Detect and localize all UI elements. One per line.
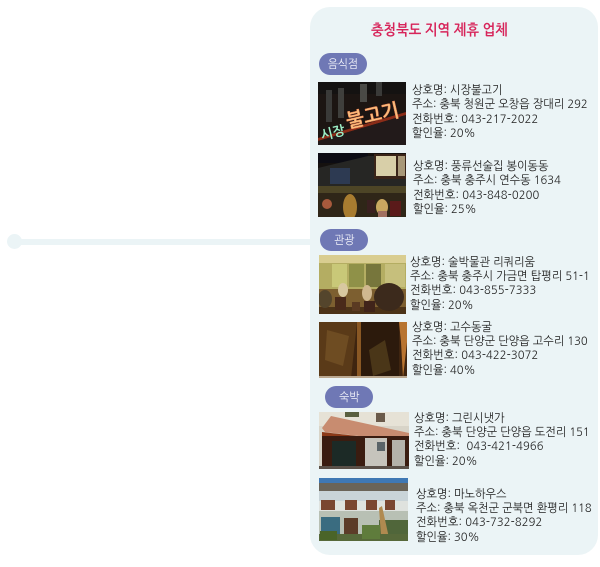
info: lodging 1: 전화번호: 043-421-4966 [414, 440, 544, 452]
info: restaurant 2 [413, 160, 561, 215]
photo: neon sign restaurant [318, 82, 406, 145]
photo: guesthouse with tiled roof [319, 412, 409, 469]
info: tourism 1: 할인율: 20% [410, 299, 474, 311]
info: tourism 1 [410, 256, 590, 311]
info: restaurant 1: 상호명: 시장불고기 [412, 84, 502, 96]
info: lodging 1: 할인율: 20% [414, 455, 478, 467]
photo: manor house [319, 478, 408, 541]
category pill: lodging [325, 386, 373, 408]
info: restaurant 2: 상호명: 풍류선술집 봉이동동 [413, 160, 549, 172]
category pill: lodging: 숙박 [339, 391, 359, 403]
photo: neon sign restaurant: 불고기 [344, 99, 401, 131]
info: restaurant 2: 전화번호: 043-848-0200 [413, 189, 539, 201]
info: lodging 1: 주소: 충북 단양군 단양읍 도전리 151 [414, 426, 590, 438]
category pill: restaurants: 음식점 [328, 58, 358, 70]
info: lodging 2: 주소: 충북 옥천군 군북면 환평리 118 [416, 502, 592, 514]
info: tourism 2: 전화번호: 043-422-3072 [412, 349, 538, 361]
photo: limestone cave [319, 322, 407, 378]
category pill: tourism: 관광 [334, 234, 354, 246]
info: restaurant 1: 전화번호: 043-217-2022 [412, 113, 538, 125]
info: restaurant 1: 할인율: 20% [412, 127, 476, 139]
info: tourism 2: 할인율: 40% [412, 364, 476, 376]
info: tourism 2 [412, 320, 588, 376]
title: 충청북도 지역 제휴 업체 [371, 23, 508, 38]
photo: liquor museum [319, 255, 406, 314]
info: lodging 1: 상호명: 그린시냇가 [414, 412, 504, 424]
info: lodging 2 [416, 488, 592, 543]
photo: neon sign restaurant: 시장 [319, 123, 347, 142]
info: lodging 2: 전화번호: 043-732-8292 [416, 516, 542, 528]
info: tourism 1: 전화번호: 043-855-7333 [410, 284, 536, 296]
category pill: tourism [320, 229, 368, 251]
info: restaurant 2: 주소: 충북 충주시 연수동 1634 [413, 174, 561, 186]
info: tourism 1: 상호명: 술박물관 리쿼리움 [410, 256, 535, 268]
connector line with dot [7, 234, 310, 249]
info: lodging 1 [414, 412, 590, 467]
info: tourism 1: 주소: 충북 충주시 가금면 탑평리 51-1 [410, 270, 590, 282]
info: tourism 2: 주소: 충북 단양군 단양읍 고수리 130 [412, 335, 588, 347]
info: tourism 2: 상호명: 고수동굴 [412, 320, 492, 332]
info: lodging 2: 할인율: 30% [416, 531, 480, 543]
panel: regional partner businesses [310, 7, 598, 555]
info: restaurant 1 [412, 84, 588, 139]
info: restaurant 2: 할인율: 25% [413, 203, 477, 215]
info: restaurant 1: 주소: 충북 청원군 오창읍 장대리 292 [412, 98, 588, 110]
info: lodging 2: 상호명: 마노하우스 [416, 488, 506, 500]
photo: pub exterior [318, 153, 406, 217]
category pill: restaurants [319, 53, 367, 75]
